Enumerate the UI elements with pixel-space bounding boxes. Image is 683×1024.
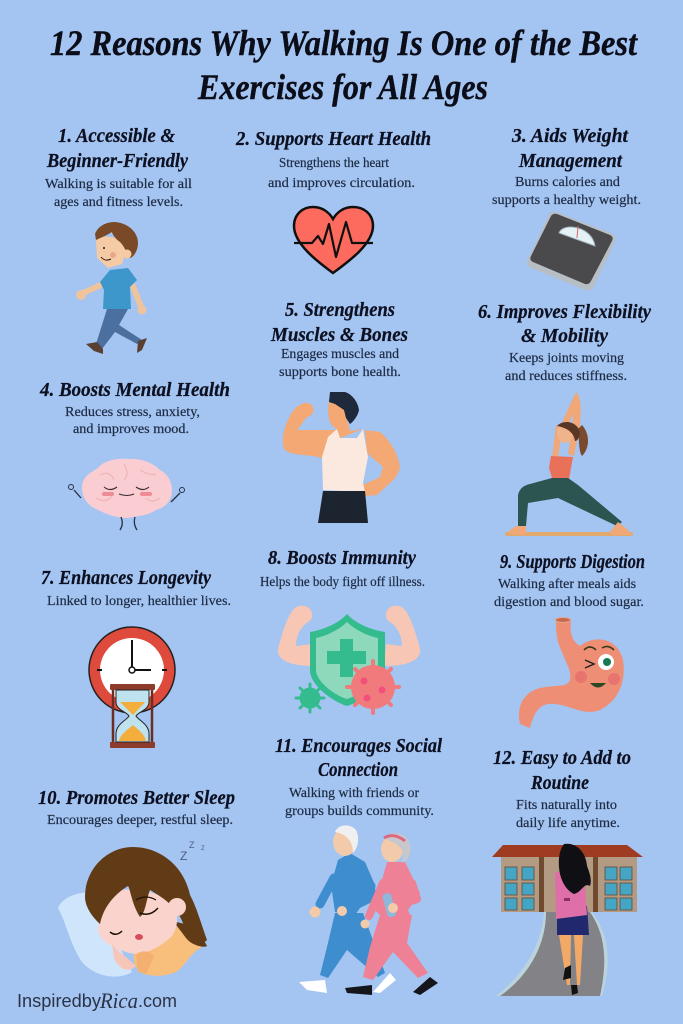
title <box>50 23 638 107</box>
icon: heart with pulse <box>294 207 373 273</box>
title: Exercises for All Ages <box>197 67 488 107</box>
heading 8: 8. Boosts Immunity <box>268 547 416 569</box>
text 11: Walking with friends or <box>289 786 419 801</box>
text 10: Encourages deeper, restful sleep. <box>47 813 233 828</box>
heading 10: 10. Promotes Better Sleep <box>38 787 235 809</box>
heading 6: & Mobility <box>521 325 608 347</box>
icon: walking seniors <box>299 825 438 995</box>
heading 5: 5. Strengthens <box>285 299 395 321</box>
text 6: and reduces stiffness. <box>505 369 627 384</box>
panel: 5 muscles <box>270 299 408 523</box>
heading 1 <box>46 125 188 172</box>
heading 3 <box>511 125 629 172</box>
text 5 <box>279 347 401 380</box>
text 3: Burns calories and <box>515 175 620 190</box>
text 11: groups builds community. <box>285 804 434 819</box>
heading 7: 7. Enhances Longevity <box>41 567 211 589</box>
heading 11: 11. Encourages Social <box>275 735 442 757</box>
logo: Rica <box>99 988 138 1013</box>
panel: 3 weight <box>492 125 641 290</box>
text 8: Helps the body fight off illness. <box>260 575 425 590</box>
icon: sleeping girl: Z <box>201 846 205 852</box>
text 2: and improves circulation. <box>268 176 415 191</box>
text 4: Reduces stress, anxiety, <box>65 405 200 420</box>
text 4 <box>65 405 200 437</box>
icon: walking boy <box>76 222 147 354</box>
heading 9: 9. Supports Digestion <box>500 551 645 573</box>
heading 1: 1. Accessible & <box>58 125 175 147</box>
text 9: Walking after meals aids <box>498 577 636 592</box>
heading 3: 3. Aids Weight <box>511 125 629 147</box>
text 6: Keeps joints moving <box>509 351 624 366</box>
icon: sleeping girl: Z <box>189 840 195 850</box>
text 5: Engages muscles and <box>281 347 399 362</box>
heading 4: 4. Boosts Mental Health <box>39 379 230 401</box>
panel: 9 digestion <box>494 551 645 728</box>
heading 6: 6. Improves Flexibility <box>478 301 651 323</box>
title: 12 Reasons Why Walking Is One of the Best <box>50 23 638 63</box>
icon: calm brain <box>68 459 184 530</box>
text 3 <box>492 175 641 208</box>
text 5: supports bone health. <box>279 365 401 380</box>
heading 12: Routine <box>530 772 589 794</box>
icon: yoga pose <box>505 392 633 536</box>
logo: Inspiredby <box>17 991 101 1011</box>
panel: 10 sleep <box>38 787 235 977</box>
icon: smiling stomach <box>519 618 624 728</box>
panel: 11 social <box>275 735 442 995</box>
text 7: Linked to longer, healthier lives. <box>47 594 231 609</box>
heading 2: 2. Supports Heart Health <box>235 128 431 150</box>
text 9 <box>494 577 644 610</box>
heading 12: 12. Easy to Add to <box>493 747 631 769</box>
icon: school and girl walking <box>492 844 643 996</box>
text 12: daily life anytime. <box>516 816 620 831</box>
panel: 12 routine <box>492 747 643 996</box>
text 4: and improves mood. <box>73 422 189 437</box>
heading 11 <box>275 735 442 781</box>
panel: 2 heart <box>235 128 431 273</box>
heading 12 <box>493 747 631 794</box>
text 3: supports a healthy weight. <box>492 193 641 208</box>
text 9: digestion and blood sugar. <box>494 595 644 610</box>
logo <box>17 988 177 1013</box>
text 12: Fits naturally into <box>516 798 617 813</box>
panel: 6 flexibility <box>478 301 651 536</box>
icon: clock and hourglass <box>89 627 175 748</box>
icon: shield, muscles and viruses <box>278 606 420 713</box>
heading 6 <box>478 301 651 347</box>
text 1 <box>45 177 192 210</box>
text 2: Strengthens the heart <box>279 156 389 171</box>
text 6 <box>505 351 627 384</box>
icon: sleeping girl <box>58 840 207 977</box>
text 2 <box>268 156 415 191</box>
icon: sleeping girl: Z <box>180 849 187 863</box>
panel: 4 mental health <box>39 379 230 530</box>
heading 5: Muscles & Bones <box>270 324 408 346</box>
icon: flexing man <box>283 392 400 523</box>
panel: 8 immunity <box>260 547 425 713</box>
text 12 <box>516 798 620 831</box>
heading 3: Management <box>518 150 623 172</box>
panel: 1 accessible <box>45 125 192 354</box>
text 11 <box>285 786 434 819</box>
icon: bathroom scale <box>527 211 616 290</box>
heading 5 <box>270 299 408 346</box>
heading 11: Connection <box>318 759 398 781</box>
text 1: Walking is suitable for all <box>45 177 192 192</box>
text 1: ages and fitness levels. <box>54 195 183 210</box>
heading 1: Beginner-Friendly <box>46 150 188 172</box>
panel: 7 longevity <box>41 567 231 748</box>
logo: .com <box>138 991 177 1011</box>
